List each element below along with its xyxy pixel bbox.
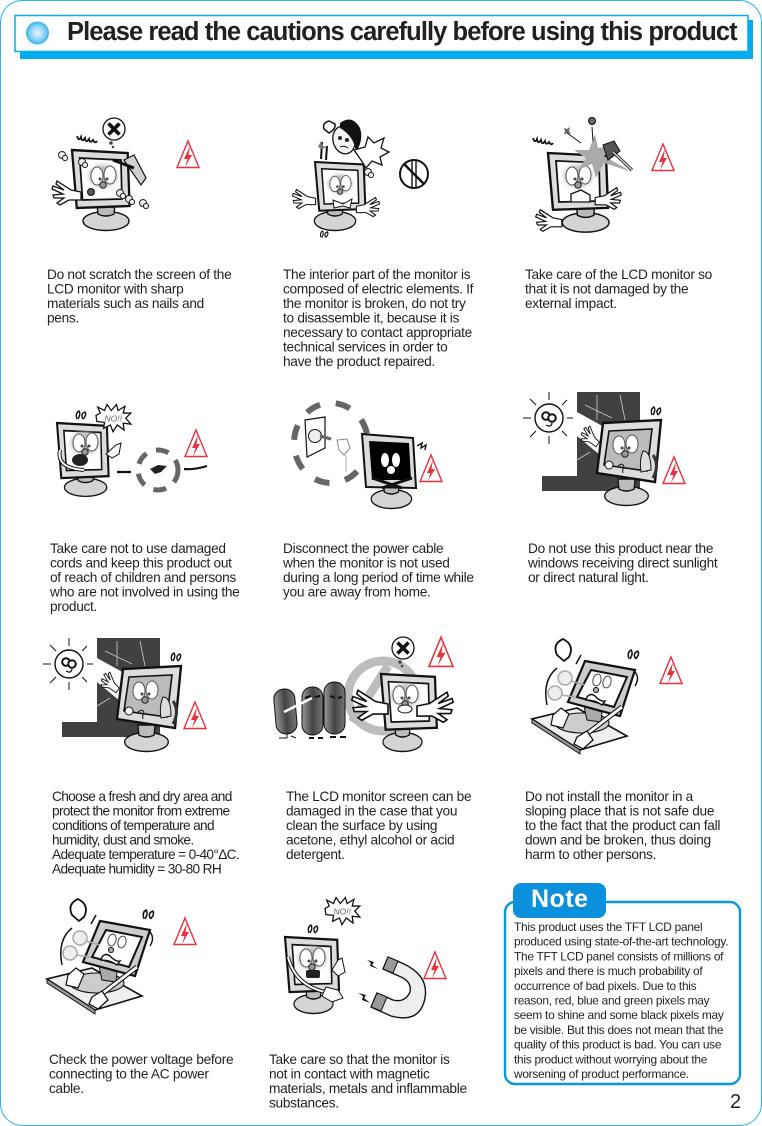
text: cleaners: clean the surface by using [286,818,437,833]
illustration: disconnect power cable [294,403,426,508]
icon: X bubble [103,118,125,148]
text: cords: Take care not to use damaged [50,541,226,556]
text: disconnect: you are away from home. [283,584,431,600]
note text: reason, red, blue and green pixels may [514,994,710,1008]
text: interior: composed of electric elements. If [283,282,474,296]
note text: this product without worrying about the [514,1052,708,1066]
text: cleaners: detergent. [286,847,345,862]
title: Please read the cautions carefully before using this product [67,18,738,46]
text: temperature and humidity: humidity, dust and smoke. [52,832,194,848]
illustration: power voltage [47,899,154,1014]
icon: warning triangle [184,702,206,728]
text: magnetic: substances. [269,1096,339,1110]
text: cords: cords and keep this product out [50,556,232,570]
text: cleaners: The LCD monitor screen can be [286,789,471,804]
text: interior: to disassemble it, because it is [283,310,459,326]
text: sloping: Do not install the monitor in a [525,789,694,804]
illustration: magnetic materials [285,898,426,1018]
illustration: external impact [533,118,632,232]
text: sloping: sloping place that is not safe due [525,804,714,818]
icon: warning triangle [174,918,196,944]
note text: This product uses the TFT LCD panel [514,920,702,934]
illustration: direct sunlight [523,392,661,506]
icon: blue bullet [26,22,49,44]
text: scratch: LCD monitor with sharp [47,282,184,296]
icon: warning triangle [429,637,453,666]
icon: horseshoe magnet [371,957,426,1018]
text: disconnect: when the monitor is not used [282,556,450,570]
text: interior: necessary to contact appropriate [283,325,472,340]
icon: warning triangle [663,457,685,484]
note text: pixels and there is much probability of [514,964,703,978]
icon: warning triangle [420,455,442,482]
text: impact: that it is not damaged by the [525,282,688,296]
text: cords: product. [50,599,97,614]
text: temperature and humidity: Choose a fresh and dry area and [52,789,232,804]
note text: seem to shine and some black pixels may [514,1008,724,1022]
text: interior: have the product repaired. [283,354,435,369]
text: interior: technical services in order to [283,340,448,354]
text: temperature and humidity: conditions of temperature and [52,818,214,833]
illustration: do not disassemble [292,119,428,237]
icon: X bubble [392,637,414,667]
note text: produced using state-of-the-art technology. [514,935,728,949]
page number: 2 [730,1091,741,1113]
text: sunlight: windows receiving direct sunlight [527,556,718,570]
note text: quality of this product is bad. You can use [514,1038,722,1052]
text: voltage: cable. [49,1081,84,1096]
note text: occurrence of bad pixels. Due to this [514,979,697,993]
text: scratch: materials such as nails and [47,296,204,311]
text: scratch: Do not scratch the screen of the [47,267,231,282]
text: sunlight: Do not use this product near the [528,541,713,556]
text: cleaners: damaged in the case that you [286,804,457,818]
note text: be visible. But this does not mean that the [514,1023,724,1037]
illustration: fresh and dry area [43,638,181,752]
illustration: sloping place [532,639,639,754]
text: cords: of reach of children and persons [50,570,236,585]
text: cords: who are not involved in using the [49,584,239,600]
text: magnetic: materials, metals and inflammable [269,1081,467,1096]
note tab: Note [531,885,589,913]
text: interior: The interior part of the monitor is [283,267,471,282]
dashed circle with frayed cord [138,450,178,490]
icon: warning triangle [652,144,674,170]
illustration: chemical cleaners [273,637,453,752]
text: disconnect: Disconnect the power cable [283,541,443,556]
illustration: scratch the screen [52,118,149,230]
text: voltage: Check the power voltage before [49,1052,233,1067]
text: temperature and humidity: Adequate humidity = 30-80 RH [52,862,221,876]
icon: warning triangle [660,657,682,684]
icon: warning triangle [424,952,446,978]
text: disconnect: during a long period of time while [283,570,474,585]
prohibition ring [348,661,418,731]
text: sloping: to the fact that the product can fall [525,818,720,833]
note tab [513,883,606,918]
text: magnetic: Take care so that the monitor is [269,1052,450,1067]
note text: The TFT LCD panel consists of millions of [514,949,724,963]
text: voltage: connecting to the AC power [49,1066,209,1082]
text: impact: external impact. [525,296,617,311]
text: impact: Take care of the LCD monitor so [525,267,713,282]
icon: warning triangle [185,430,207,456]
text: cleaners: acetone, ethyl alcohol or acid [286,832,454,848]
text: interior: the monitor is broken, do not try [283,296,466,311]
text: sloping: harm to other persons. [525,847,656,862]
icon: warning triangle [177,141,199,168]
header banner [15,16,753,59]
text: temperature and humidity: Adequate temperature = 0-40°ΔC. [52,847,239,862]
text: magnetic: not in contact with magnetic [269,1066,430,1082]
text: scratch: pens. [47,310,79,326]
note text: worsening of product performance. [513,1067,689,1081]
illustration: damaged cords [57,405,207,496]
text: sunlight: or direct natural light. [528,570,649,585]
text: temperature and humidity: protect the monitor from extreme [52,804,229,818]
note panel [505,883,740,1084]
text: sloping: down and be broken, thus doing [525,832,711,848]
icon: prohibited screwdriver [400,160,428,188]
